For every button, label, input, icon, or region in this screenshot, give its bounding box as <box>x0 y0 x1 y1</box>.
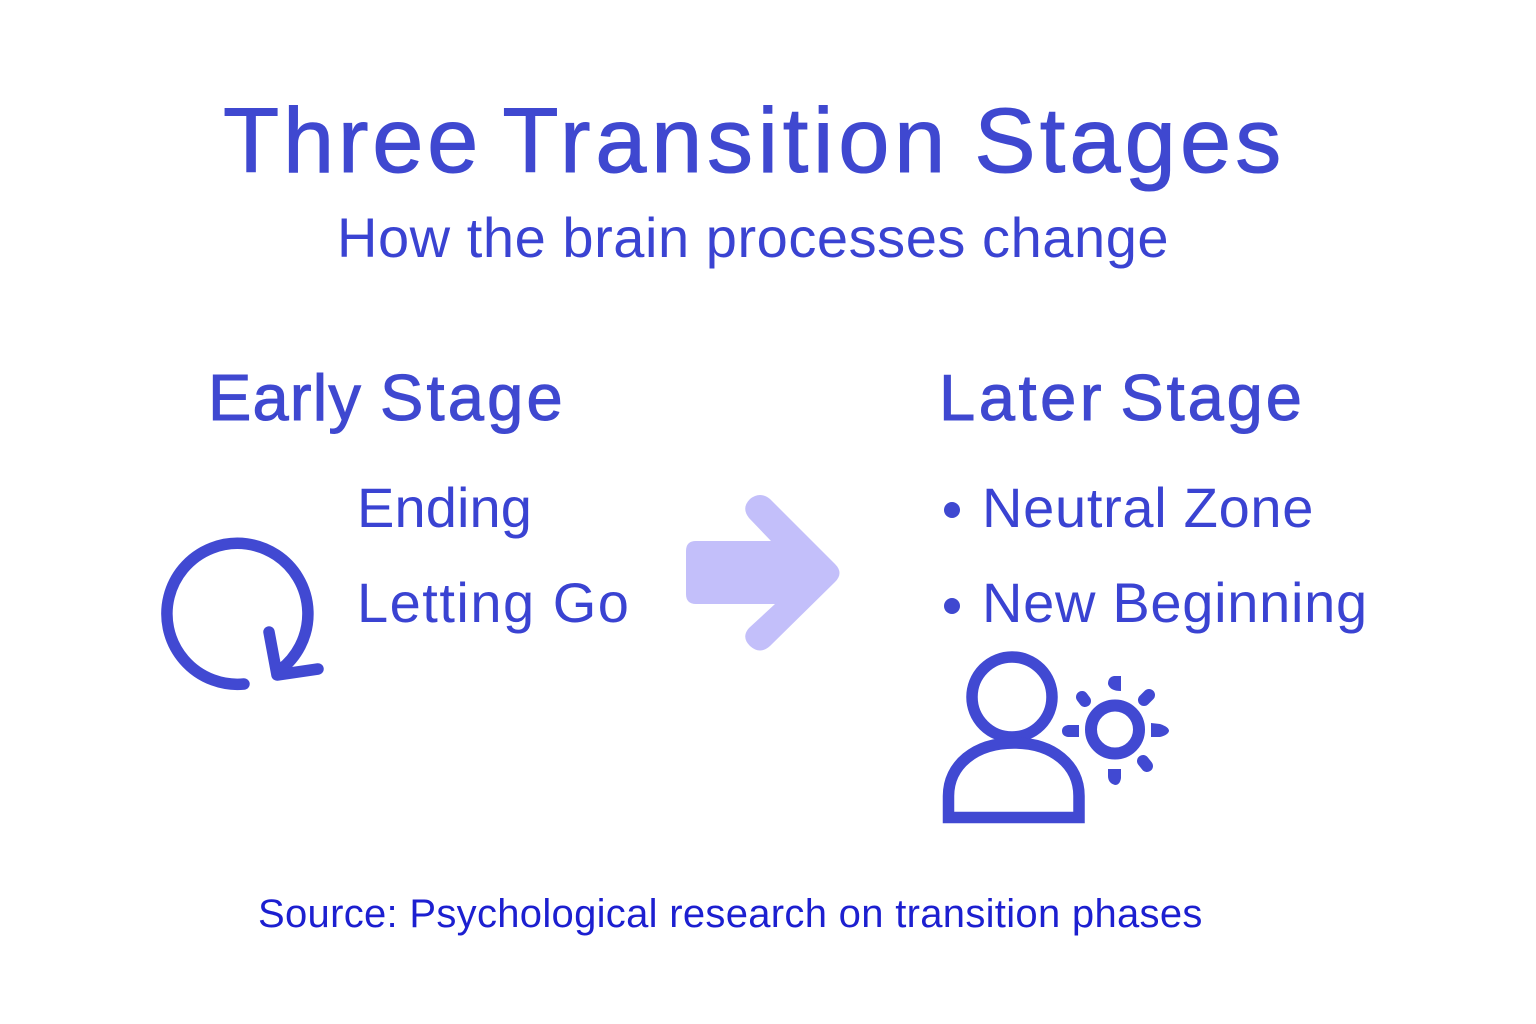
text: letting go: Letting Go <box>357 571 630 634</box>
heading: early stage: Early Stage <box>208 361 566 434</box>
text: ending: Ending <box>357 476 532 539</box>
title: Three Transition Stages <box>223 90 1285 192</box>
bullet: new beginning <box>944 598 960 614</box>
list item: new beginning: New Beginning <box>982 571 1368 634</box>
subtitle: How the brain processes change <box>337 206 1169 269</box>
list item: neutral zone: Neutral Zone <box>982 476 1314 539</box>
bullet: neutral zone <box>944 502 960 518</box>
source note: Source: Psychological research on transition phases <box>258 892 1203 936</box>
heading: later stage: Later Stage <box>939 361 1305 434</box>
